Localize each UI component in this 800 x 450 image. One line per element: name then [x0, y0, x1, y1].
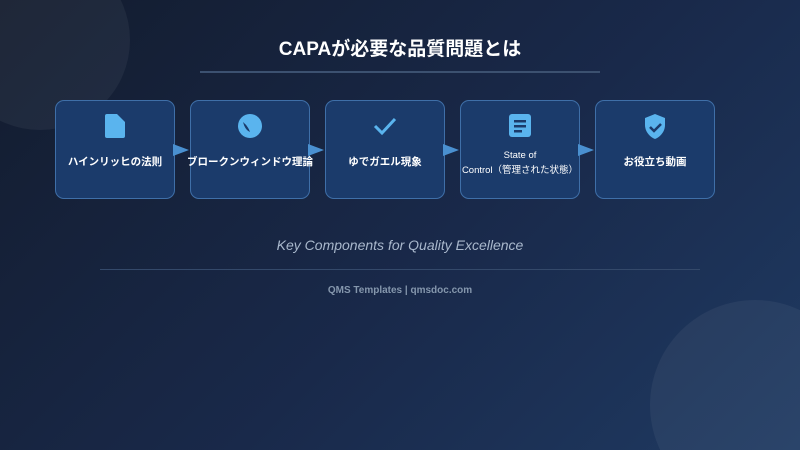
icon: document: [105, 114, 125, 138]
panel: step 2: [190, 100, 310, 199]
subtitle: Key Components for Quality Excellence: [277, 237, 523, 253]
arrow 1: [173, 144, 189, 156]
panel: step 4: [460, 100, 580, 199]
panel: step 5: お役立ち動画: [624, 156, 686, 168]
panel: step 3: ゆでガエル現象: [348, 156, 422, 168]
title: CAPAが必要な品質問題とは: [279, 39, 521, 60]
panel: step 1: [55, 100, 175, 199]
panel: step 1: ハインリッヒの法則: [68, 156, 162, 168]
arrow 3: [443, 144, 459, 156]
icon: circle: [238, 114, 262, 138]
icon: shield: [645, 114, 665, 139]
arrow 4: [578, 144, 594, 156]
panel: step 4: State of: [504, 150, 536, 161]
panel: step 4: Control（管理された状態）: [462, 165, 578, 176]
icon: check: [374, 118, 396, 135]
panel: step 5: [595, 100, 715, 199]
icon: list document: [509, 114, 531, 137]
arrow 2: [308, 144, 324, 156]
footer: QMS Templates | qmsdoc.com: [328, 285, 472, 296]
panel: step 2: ブロークンウィンドウ理論: [187, 156, 313, 168]
panel: step 3: [325, 100, 445, 199]
